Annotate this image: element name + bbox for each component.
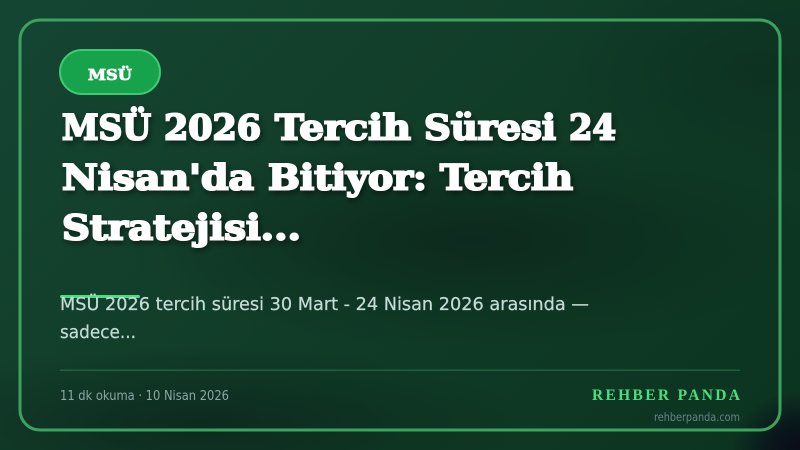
title: Bitiyor:: [268, 158, 427, 198]
brand name: REHBER PANDA: [592, 387, 741, 404]
title: MSÜ: [62, 106, 151, 148]
title: Stratejisi...: [62, 208, 301, 248]
title: Süresi: [424, 108, 556, 148]
subtitle: sadece...: [60, 322, 136, 343]
title: Tercih: [275, 108, 411, 148]
title: Tercih: [440, 158, 573, 198]
accent bar: [60, 295, 140, 298]
title: 24: [569, 108, 616, 148]
badge: MSÜ: MSÜ: [88, 65, 132, 84]
meta: reading time and date: 11 dk okuma · 10 Nisan 2026: [60, 388, 229, 404]
title: [62, 106, 616, 248]
badge: MSÜ: [60, 50, 160, 94]
subtitle: MSÜ 2026 tercih süresi 30 Mart - 24 Nisan 2026 arasında —: [60, 293, 589, 315]
brand url: rehberpanda.com: [654, 410, 740, 424]
divider: [60, 370, 740, 371]
title: Nisan'da: [62, 158, 254, 198]
subtitle: [60, 293, 589, 343]
title: 2026: [164, 108, 261, 148]
